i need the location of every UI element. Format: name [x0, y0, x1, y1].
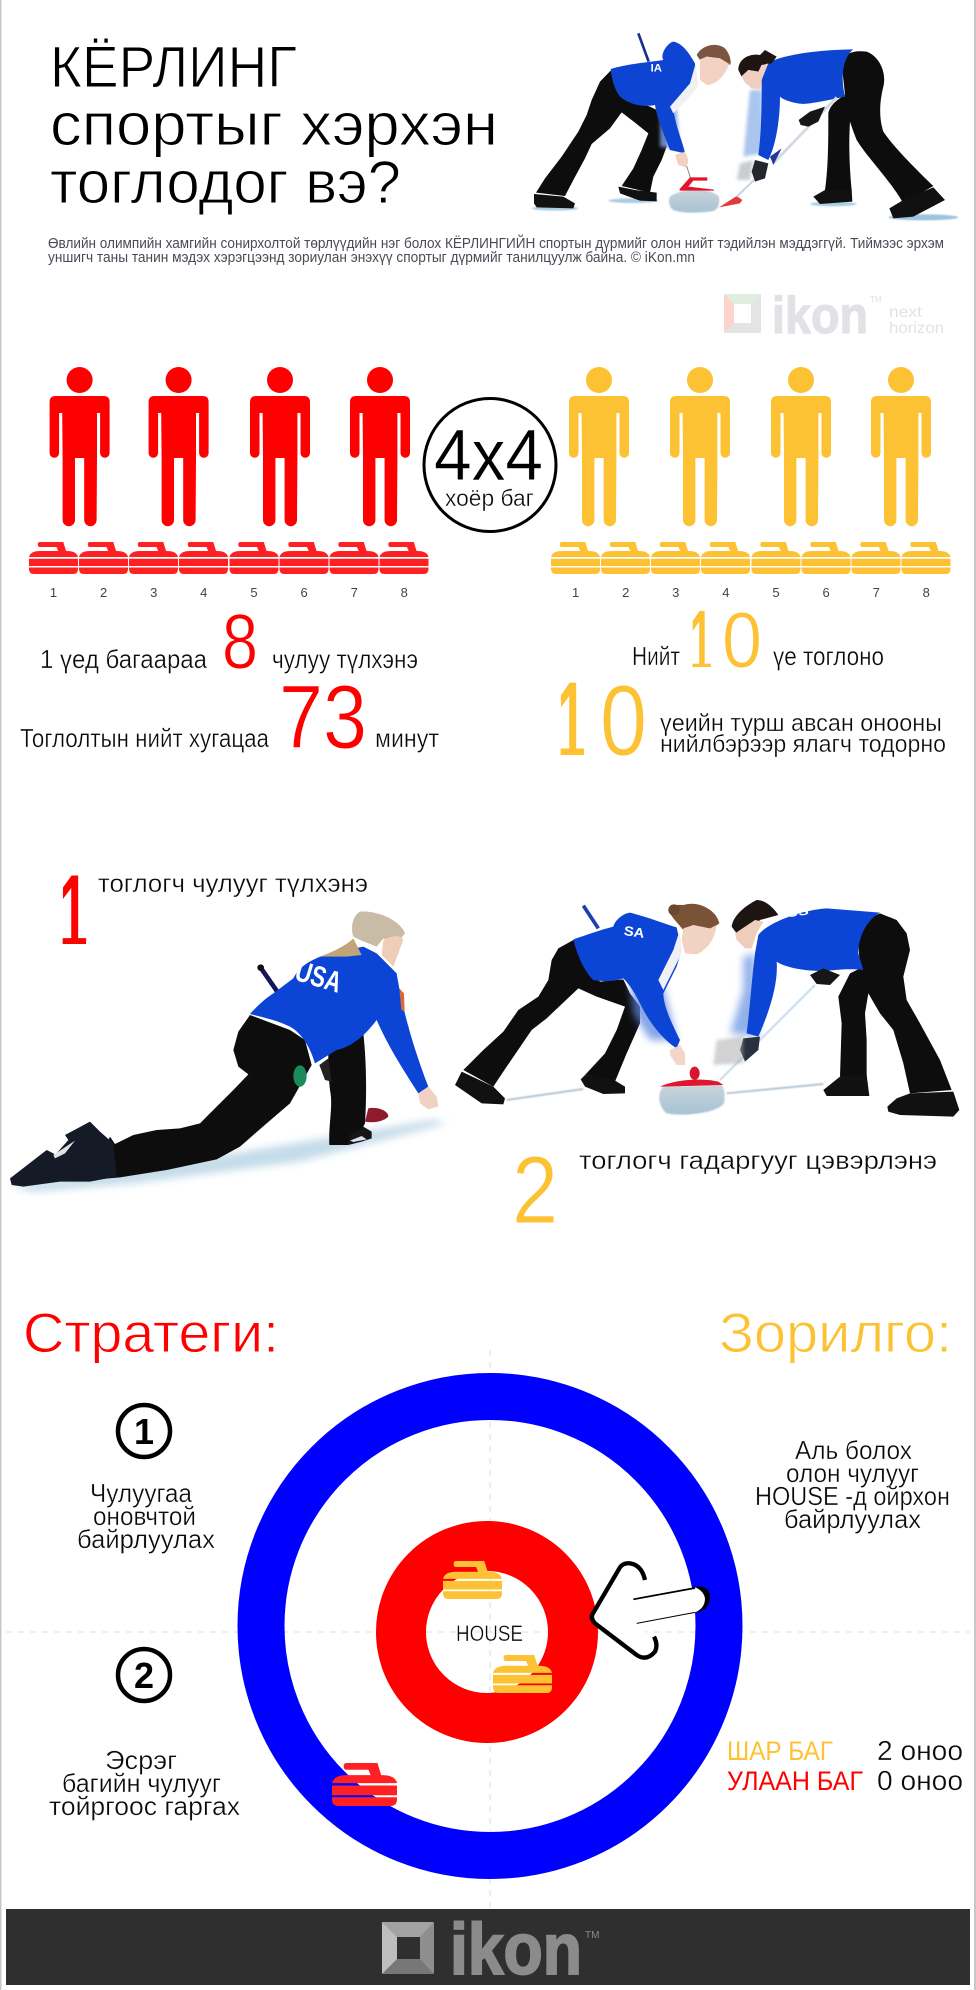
red stone numbers: 7 — [351, 585, 358, 600]
goal text: байрлуулах — [784, 1504, 921, 1534]
stat: 8 stones per end: чулуу түлхэнэ — [272, 644, 418, 674]
strategy item 1: 1 — [134, 1411, 154, 1452]
red stone outside house — [332, 1763, 397, 1806]
target: curling house: HOUSE — [456, 1621, 523, 1646]
watermark logo: horizon — [889, 320, 944, 337]
photo: two sweepers with stone: US — [786, 905, 810, 920]
heading: goal: Зорилго: — [719, 1301, 952, 1364]
stat: 8 stones per end: 8 — [222, 597, 258, 685]
score table: 0 оноо — [877, 1765, 963, 1796]
arrow pointing to house — [592, 1562, 710, 1658]
strategy item 1: оновчтой — [93, 1501, 196, 1531]
photo: two sweepers with stone — [455, 900, 959, 1117]
photo: kneeling thrower — [10, 911, 447, 1192]
yellow stone numbers: 2 — [622, 585, 629, 600]
photo: kneeling thrower: USA — [291, 954, 346, 1000]
score table: ШАР БАГ — [727, 1736, 833, 1766]
footer bar with logo — [6, 1909, 970, 1990]
red stone numbers — [50, 585, 408, 600]
stat: 10 ends total score: 1 — [558, 659, 586, 784]
stat: 10 ends total score — [560, 682, 945, 757]
strategy item 2: Эсрэг — [105, 1745, 177, 1775]
target: curling house — [261, 1396, 719, 1856]
title: КЁРЛИНГ — [50, 35, 297, 100]
strategy item 1: байрлуулах — [77, 1524, 215, 1554]
yellow stone numbers: 4 — [722, 585, 730, 600]
yellow stone numbers: 6 — [822, 585, 830, 600]
score table: УЛААН БАГ — [727, 1766, 863, 1796]
stat: 73 minutes — [20, 668, 439, 768]
footer bar with logo: ikon — [450, 1910, 582, 1990]
photo: two sweepers at the top: IA — [651, 62, 662, 74]
stat: 8 stones per end — [40, 597, 418, 685]
heading: strategy: Стратеги: — [23, 1301, 279, 1364]
strategy item 1 — [77, 1405, 215, 1554]
yellow stone numbers: 8 — [923, 585, 930, 600]
red stone numbers: 3 — [150, 585, 157, 600]
watermark logo — [724, 287, 944, 345]
goal text: HOUSE -д ойрхон — [755, 1481, 950, 1511]
yellow stone numbers — [572, 585, 930, 600]
stat: 10 ends: Нийт — [632, 641, 680, 671]
score table — [727, 1735, 963, 1796]
step 2 label: 2 — [512, 1137, 558, 1244]
step 1 label — [62, 876, 367, 944]
strategy item 1: Чулуугаа — [90, 1478, 193, 1508]
red stone numbers: 4 — [200, 585, 207, 600]
red stone numbers: 2 — [100, 585, 107, 600]
red team stones — [29, 542, 428, 574]
stat: 10 ends: 1 — [690, 593, 712, 693]
red stone numbers: 1 — [50, 585, 57, 600]
yellow stone numbers: 1 — [572, 585, 579, 600]
red stone numbers: 6 — [300, 585, 308, 600]
goal text: олон чулууг — [786, 1458, 919, 1488]
yellow stone numbers: 3 — [672, 585, 679, 600]
step 2 label: тоглогч гадаргууг цэвэрлэнэ — [579, 1147, 937, 1175]
yellow stone in house — [493, 1655, 552, 1693]
red team players — [50, 367, 410, 526]
photo: two sweepers at the top — [532, 33, 958, 220]
stat: 73 minutes: Тоглолтын нийт хугацаа — [20, 723, 269, 753]
stat: 10 ends: 0 — [722, 595, 762, 684]
stat: 10 ends: үе тоглоно — [773, 641, 884, 671]
stat: 10 ends total score: 0 — [600, 665, 647, 777]
step 1 label: 1 — [60, 852, 88, 972]
strategy item 2: 2 — [134, 1655, 154, 1696]
title — [50, 35, 498, 216]
strategy item 2: багийн чулууг — [62, 1768, 221, 1798]
4x4 badge: 4x4 — [434, 416, 543, 496]
stat: 73 minutes: 73 — [279, 668, 367, 768]
stat: 10 ends total score: үеийн турш авсан онооны — [660, 710, 942, 737]
red stone numbers: 8 — [401, 585, 408, 600]
strategy item 2 — [49, 1649, 240, 1821]
step 1 label: тоглогч чулууг түлхэнэ — [98, 870, 368, 898]
title: тоглодог вэ? — [50, 149, 401, 216]
goal text: Аль болох — [795, 1435, 912, 1465]
watermark logo: TM — [870, 295, 882, 304]
stat: 10 ends — [634, 611, 884, 670]
yellow stone numbers: 7 — [873, 585, 880, 600]
intro text: уншигч таны танин мэдэх хэрэгцээнд зориулан энэхүү спортыг дүрмийг танилцуулж байна. © iKon.mn — [48, 249, 695, 266]
4x4 badge — [424, 398, 556, 532]
stat: 8 stones per end: 1 үед багаараа — [40, 644, 207, 674]
score table: 2 оноо — [877, 1735, 963, 1766]
4x4 badge: хоёр баг — [445, 485, 534, 511]
footer bar with logo: TM — [585, 1930, 599, 1941]
goal text — [755, 1435, 950, 1534]
yellow stone in house — [443, 1561, 502, 1599]
title: спортыг хэрхэн — [50, 91, 498, 158]
stat: 73 minutes: минут — [375, 723, 439, 753]
step 2 label — [512, 1137, 937, 1244]
yellow team players — [569, 367, 931, 526]
stat: 10 ends total score: нийлбэрээр ялагч тодорно — [660, 731, 946, 758]
red stone numbers: 5 — [250, 585, 258, 600]
intro text — [48, 234, 944, 266]
watermark logo: ikon — [772, 287, 868, 345]
watermark logo: next — [889, 304, 923, 321]
yellow team stones — [551, 542, 950, 574]
photo: two sweepers with stone: SA — [623, 923, 646, 941]
yellow stone numbers: 5 — [772, 585, 780, 600]
strategy item 2: тойргоос гаргах — [49, 1791, 240, 1821]
